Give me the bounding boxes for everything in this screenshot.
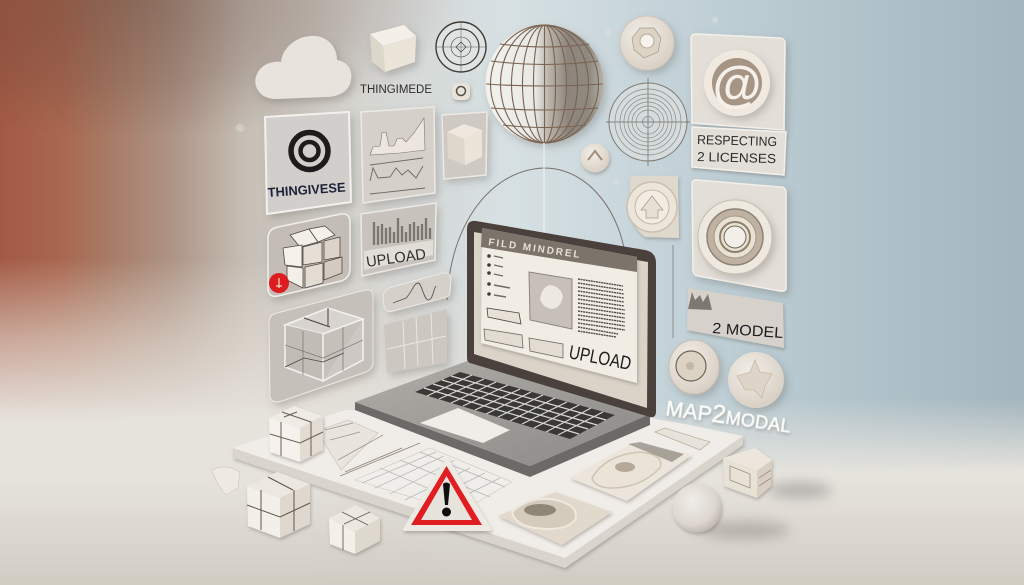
laptop screen bezel — [474, 232, 648, 408]
screen button — [484, 329, 523, 348]
panel: curve — [383, 273, 451, 311]
screen title: FILD MINDREL — [488, 237, 580, 261]
screen button — [529, 338, 563, 358]
shadow: right cube — [768, 482, 832, 498]
paper sheet — [317, 420, 383, 470]
label: UPLOAD: UPLOAD — [365, 246, 427, 271]
icon: grid cells — [387, 313, 446, 369]
desk board — [233, 410, 743, 568]
clay eye tile — [570, 445, 692, 501]
clay tray — [498, 492, 612, 545]
cube on board — [269, 406, 323, 462]
icon: dial disc — [669, 340, 719, 394]
screen header — [481, 228, 637, 272]
bokeh dots — [236, 17, 718, 185]
icon: relief disc — [728, 352, 784, 408]
screen sidebar — [487, 254, 510, 297]
icon: red dot — [269, 273, 289, 293]
title: MAP2MODAL: MAP2MODAL — [664, 393, 793, 438]
icon: small house disc — [580, 144, 610, 172]
mini panel — [655, 428, 710, 450]
label: THINGIVERSE: THINGIVESE — [267, 180, 346, 200]
icon: box — [447, 124, 482, 165]
laptop — [355, 221, 656, 477]
icon: fingerprint circle — [606, 78, 690, 166]
cube front small — [329, 505, 380, 554]
connector: globe to laptop — [543, 143, 545, 238]
screen model thumbnail — [529, 272, 572, 329]
icon: concentric target — [436, 22, 486, 72]
text tile — [628, 442, 684, 462]
icon: concentric rings — [698, 200, 772, 274]
laptop base — [355, 360, 650, 477]
icon: stacked blocks — [283, 226, 342, 288]
cube front large — [247, 472, 310, 538]
icon: cloud — [255, 36, 351, 99]
keyboard — [415, 372, 615, 439]
cube right — [723, 448, 772, 498]
panel: respecting licenses — [692, 127, 786, 175]
panel: upload card — [361, 203, 436, 276]
chart: upload bars — [374, 218, 430, 245]
panel: blocks — [268, 214, 350, 296]
panel: ring target — [692, 180, 786, 291]
laptop lid — [467, 221, 656, 417]
warning sign — [405, 460, 489, 529]
chart: lower line — [370, 158, 425, 194]
label: THINGIMEDE: THINGIMEDE — [360, 84, 432, 96]
panel: icon grid — [384, 309, 447, 373]
panel: charts — [361, 107, 435, 203]
sphere — [672, 484, 722, 532]
screen page — [481, 228, 637, 383]
keyboard sketch sheet — [340, 443, 512, 512]
panel: @ license — [691, 34, 785, 130]
icon: globe — [486, 25, 604, 143]
panel: wireframe cube — [269, 290, 373, 402]
panel: 2 model — [687, 288, 784, 348]
screen label: UPLOAD: UPLOAD — [567, 342, 633, 375]
screen text paragraph — [578, 279, 625, 337]
trackpad — [420, 408, 510, 443]
clay shard — [212, 467, 240, 495]
icon: small badge — [452, 83, 470, 100]
chart: bell curve — [393, 283, 436, 303]
chart: upper shapes — [370, 118, 425, 155]
icon: Thingiverse logo — [291, 132, 328, 170]
label: respecting: RESPECTING — [697, 132, 777, 149]
icon: wire box — [285, 308, 363, 381]
icon: knob — [620, 16, 674, 70]
icon: house badge — [627, 176, 679, 238]
panel: Thingiverse — [265, 112, 351, 214]
icon: at sign: @ — [713, 56, 761, 112]
connector: vertical line — [672, 245, 674, 338]
label: 2 MODEL: 2 MODEL — [712, 320, 784, 342]
icon: mini bars — [688, 292, 712, 310]
exclamation mark — [442, 482, 451, 516]
arc connector — [447, 168, 626, 300]
screen button outline — [487, 308, 521, 324]
icon: cube top — [370, 25, 416, 72]
shadow: sphere — [700, 521, 790, 539]
globe grid — [486, 25, 603, 143]
label: 2 licenses: 2 LICENSES — [697, 149, 777, 166]
panel: cube card — [442, 112, 487, 179]
